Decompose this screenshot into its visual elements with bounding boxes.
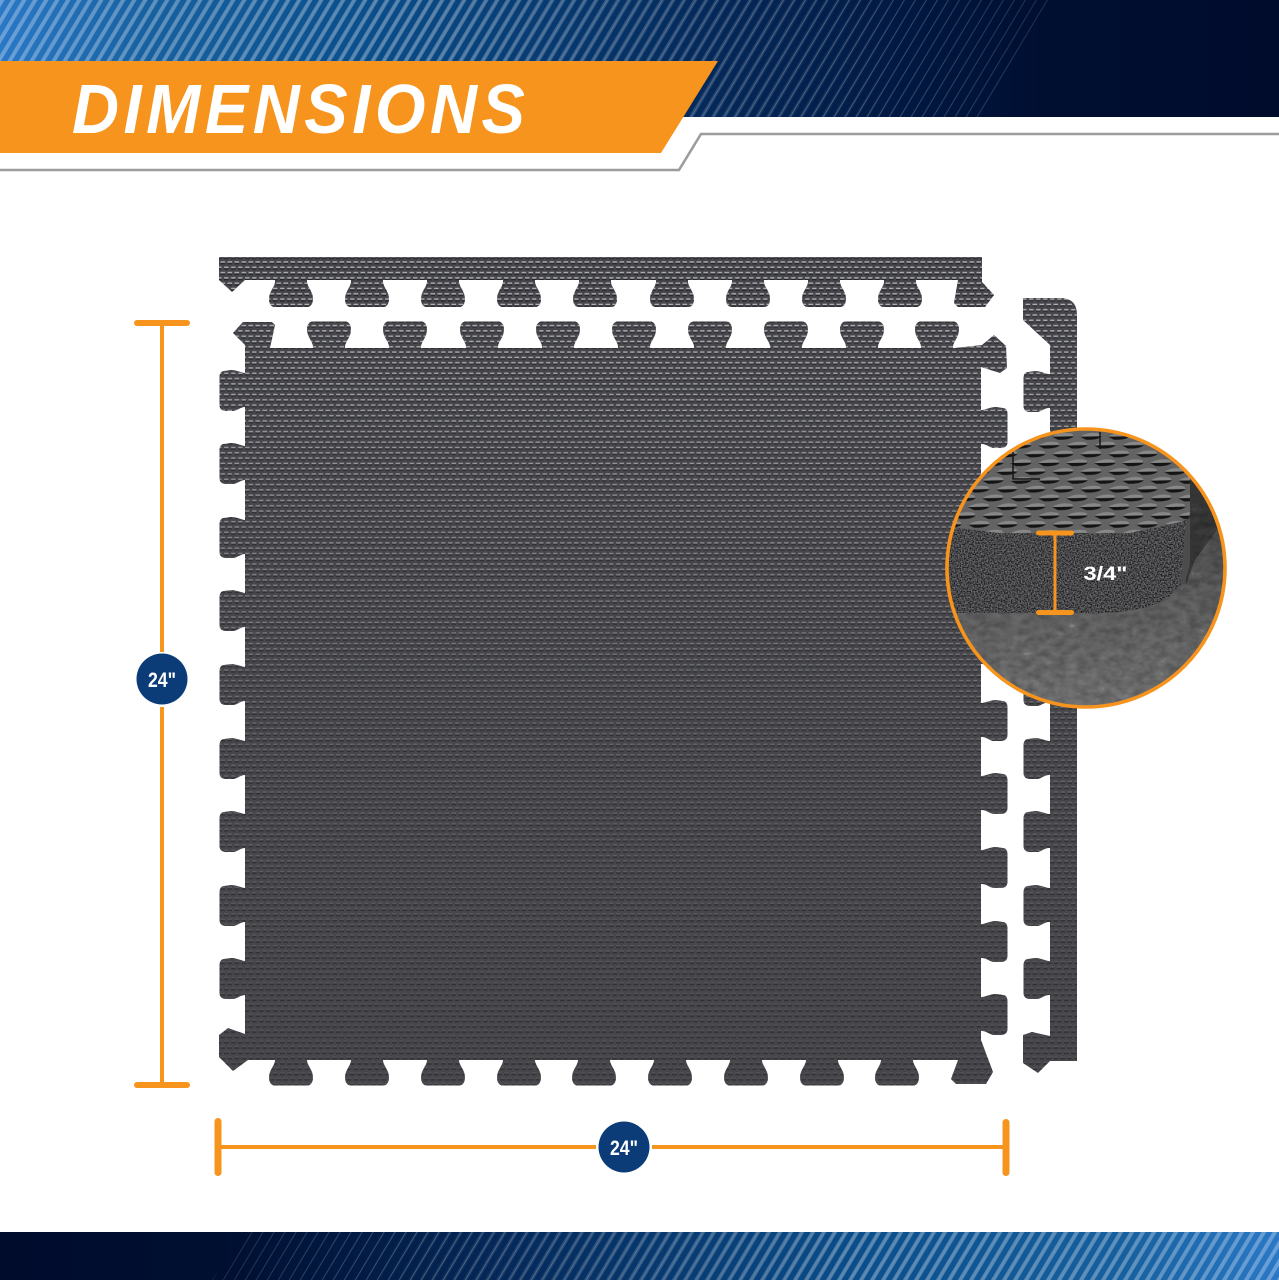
heading banner [0,61,718,153]
wall behind tile [1186,478,1218,584]
thickness measure [1036,530,1074,615]
tile side wall [944,518,1190,613]
bottom footer band [0,1232,1279,1280]
tile textured top [955,432,1190,534]
circle outline [947,429,1225,707]
interlocking strip: right neighbouring tile [1023,298,1077,1073]
thickness callout circle [940,425,1232,715]
vertical dimension bracket [134,320,190,1088]
thickness label: 3/4" [1084,564,1128,585]
main foam floor tile [210,315,1020,1095]
thin grey rule under heading [0,134,1279,170]
width badge: 24" [610,1137,638,1160]
title: DIMENSIONS [72,71,525,149]
height badge: 24" [148,669,176,692]
interlocking strip: top neighbouring tile [219,257,994,307]
floor [958,530,1223,706]
height badge [136,654,188,704]
width badge [598,1122,650,1172]
top header band [0,0,1279,117]
horizontal dimension bracket [214,1118,1010,1176]
